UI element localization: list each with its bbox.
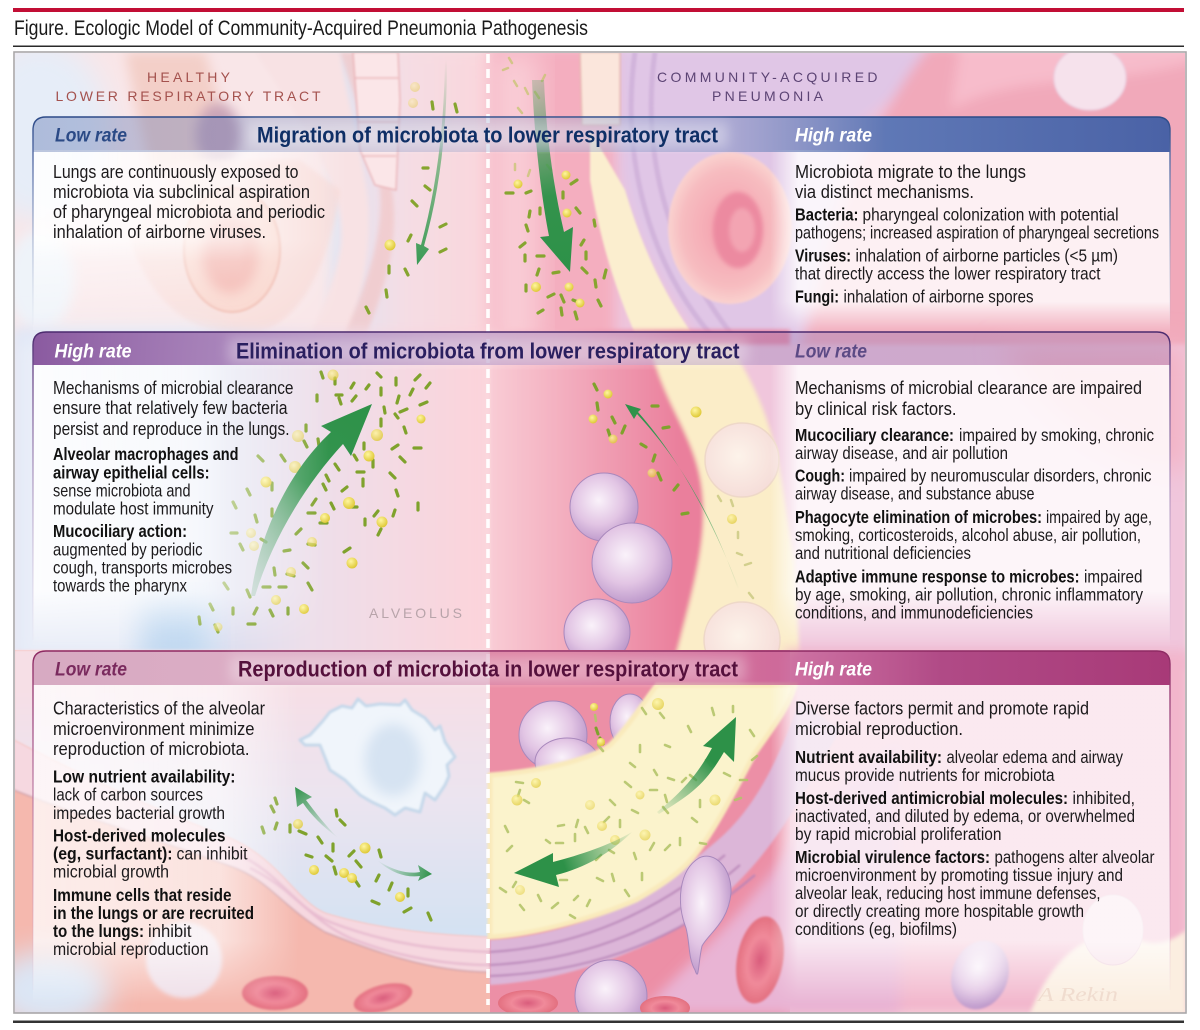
- healthy reproduction text: can inhibit: [176, 844, 248, 864]
- panel: migration: [33, 117, 1170, 335]
- pneumonia elimination text: impaired by smoking, chronic: [959, 425, 1154, 445]
- pneumonia reproduction text: Microbial virulence factors:: [795, 847, 990, 867]
- heading: community-acquired pneumonia: PNEUMONIA: [712, 88, 824, 104]
- healthy migration text: Lungs are continuously exposed to: [53, 161, 298, 182]
- healthy migration text: of pharyngeal microbiota and periodic: [53, 201, 325, 222]
- microbiota: migration panel: [366, 58, 606, 319]
- low rate tag: Low rate: [55, 126, 127, 146]
- low rate tag: Low rate: [55, 660, 127, 680]
- migration title: Migration of microbiota to lower respiratory tract: [257, 122, 718, 148]
- pneumonia reproduction text: pathogens alter alveolar: [994, 847, 1155, 867]
- pneumonia elimination text: by clinical risk factors.: [795, 398, 956, 419]
- pneumonia elimination text: Adaptive immune response to microbes:: [795, 566, 1080, 586]
- pneumonia reproduction text: Diverse factors permit and promote rapid: [795, 698, 1089, 718]
- healthy reproduction text: Low nutrient availability:: [53, 766, 236, 786]
- heading: community-acquired pneumonia: COMMUNITY-ACQUIRED: [657, 69, 878, 85]
- arrow: migration pneumonia high rate: [532, 80, 573, 272]
- migration left text backing: [34, 150, 313, 314]
- arrow: reproduction healthy up: [295, 787, 338, 838]
- healthy reproduction text: in the lungs or are recruited: [53, 903, 254, 923]
- elimination left text backing: [33, 365, 333, 650]
- healthy elimination text: Alveolar macrophages and: [53, 444, 238, 464]
- pneumonia migration text: [795, 161, 1159, 306]
- healthy migration text: inhalation of airborne viruses.: [53, 221, 266, 242]
- pneumonia elimination text: conditions, and immunodeficiencies: [795, 602, 1033, 622]
- healthy elimination text: sense microbiota and: [53, 480, 190, 500]
- pneumonia reproduction text: alveolar leak, reducing host immune defenses,: [795, 883, 1100, 903]
- reproduction panel outline: [33, 651, 1170, 990]
- pneumonia migration text: pharyngeal colonization with potential: [862, 204, 1118, 224]
- pneumonia migration text: via distinct mechanisms.: [795, 181, 974, 202]
- microbiota: elimination panel: [199, 370, 753, 632]
- pneumonia elimination text: Phagocyte elimination of microbes:: [795, 507, 1042, 527]
- pneumonia elimination text: impaired by age,: [1046, 507, 1152, 527]
- pneumonia migration text: Fungi:: [795, 286, 839, 306]
- healthy reproduction text: [53, 698, 265, 959]
- white blood cells: [570, 473, 638, 541]
- pneumonia reproduction text: mucus provide nutrients for microbiota: [795, 765, 1055, 785]
- pneumonia elimination text: by age, smoking, air pollution, chronic inflammatory: [795, 584, 1143, 604]
- cartilage rings: [353, 52, 400, 190]
- pneumonia reproduction text: conditions (eg, biofilms): [795, 919, 957, 939]
- arrow: reproduction pneumonia down: [514, 832, 632, 887]
- pneumonia elimination text: airway disease, and air pollution: [795, 443, 1008, 463]
- pneumonia elimination text: Mechanisms of microbial clearance are impaired: [795, 377, 1142, 398]
- pneumonia reproduction text: microbial reproduction.: [795, 718, 963, 739]
- bottom rule: [13, 1020, 1184, 1023]
- heading: healthy lower respiratory tract: HEALTHY: [147, 69, 231, 85]
- elimination right text backing: [770, 365, 1170, 650]
- healthy reproduction text: Characteristics of the alveolar: [53, 698, 265, 718]
- microbiota: reproduction panel: [262, 698, 757, 920]
- healthy reproduction text: microbial growth: [53, 862, 169, 882]
- pneumonia migration text: inhalation of airborne spores: [844, 286, 1034, 306]
- pneumonia elimination text: smoking, corticosteroids, alcohol abuse, air pollution,: [795, 525, 1141, 545]
- healthy elimination text: towards the pharynx: [53, 576, 187, 596]
- droplet: [680, 856, 731, 974]
- artist signature: A Rekin: [1035, 984, 1118, 1006]
- healthy elimination text: airway epithelial cells:: [53, 462, 210, 482]
- healthy elimination text: [53, 377, 294, 596]
- heading: community-acquired pneumonia: [657, 69, 878, 104]
- pneumonia reproduction text: by rapid microbial proliferation: [795, 824, 1002, 844]
- low rate tag: Low rate: [795, 342, 867, 362]
- dashed center divider: [486, 54, 490, 1005]
- healthy reproduction text: (eg, surfactant):: [53, 844, 172, 864]
- panel: reproduction: [33, 651, 1170, 1005]
- central alveolus band: [10, 330, 1186, 678]
- high rate tag: High rate: [795, 660, 872, 680]
- migration header band: [33, 117, 1170, 152]
- migration right text backing: [770, 150, 1170, 335]
- healthy elimination text: modulate host immunity: [53, 498, 214, 518]
- panel: elimination: [33, 332, 1170, 650]
- pneumonia reproduction text: alveolar edema and airway: [946, 747, 1123, 767]
- reproduction header band: [33, 651, 1170, 685]
- pneumonia migration text: Bacteria:: [795, 204, 858, 224]
- pneumonia migration text: that directly access the lower respiratory tract: [795, 264, 1101, 284]
- pneumonia reproduction text: microenvironment by promoting tissue injury and: [795, 865, 1123, 885]
- healthy reproduction text: lack of carbon sources: [53, 784, 203, 804]
- pneumonia elimination text: [795, 377, 1154, 622]
- elimination panel outline: [33, 332, 1170, 640]
- pneumonia elimination text: Mucociliary clearance:: [795, 425, 954, 445]
- healthy migration text: [53, 161, 325, 242]
- high rate tag: High rate: [795, 126, 872, 146]
- migration panel outline: [33, 117, 1170, 325]
- arrow: elimination pneumonia low rate: [625, 404, 740, 590]
- healthy elimination text: Mechanisms of microbial clearance: [53, 377, 294, 398]
- reproduction title: Reproduction of microbiota in lower respiratory tract: [238, 656, 738, 682]
- healthy migration text: microbiota via subclinical aspiration: [53, 181, 310, 202]
- healthy reproduction text: Host-derived molecules: [53, 826, 226, 846]
- reproduction right text backing: [770, 685, 1170, 1005]
- healthy elimination text: persist and reproduce in the lungs.: [53, 418, 290, 439]
- pneumonia elimination text: and nutritional deficiencies: [795, 543, 971, 563]
- pneumonia elimination text: Cough:: [795, 466, 845, 486]
- pneumonia elimination text: airway disease, and substance abuse: [795, 484, 1034, 504]
- macrophage: [300, 699, 455, 815]
- pneumonia reproduction text: or directly creating more hospitable growth: [795, 901, 1084, 921]
- healthy reproduction text: reproduction of microbiota.: [53, 738, 250, 759]
- healthy reproduction text: microenvironment minimize: [53, 718, 254, 739]
- elimination header band: [33, 332, 1170, 365]
- top red rule: [13, 8, 1184, 12]
- lower tissue and alveolar wall: [0, 650, 1190, 1030]
- heading: healthy lower respiratory tract: LOWER RESPIRATORY TRACT: [56, 88, 321, 104]
- healthy elimination text: Mucociliary action:: [53, 521, 187, 541]
- pneumonia reproduction text: [795, 698, 1155, 939]
- healthy reproduction text: Immune cells that reside: [53, 885, 232, 905]
- arrow: reproduction healthy right: [377, 860, 432, 881]
- elimination title: Elimination of microbiota from lower respiratory tract: [236, 338, 740, 364]
- healthy elimination text: augmented by periodic: [53, 540, 203, 560]
- arrow: migration healthy low rate: [416, 60, 447, 265]
- pneumonia reproduction text: inactivated, and diluted by edema, or overwhelmed: [795, 806, 1135, 826]
- figure title: Figure. Ecologic Model of Community-Acquired Pneumonia Pathogenesis: [14, 16, 588, 40]
- upper right tissue: [490, 46, 1200, 356]
- healthy elimination text: ensure that relatively few bacteria: [53, 397, 288, 418]
- pneumonia migration text: Viruses:: [795, 246, 851, 266]
- healthy reproduction text: impedes bacterial growth: [53, 803, 225, 823]
- healthy elimination text: cough, transports microbes: [53, 558, 232, 578]
- purple wall: [489, 718, 796, 986]
- reproduction left text backing: [33, 685, 300, 1005]
- pneumonia migration text: Microbiota migrate to the lungs: [795, 161, 1026, 182]
- pneumonia reproduction text: Nutrient availability:: [795, 747, 942, 767]
- pneumonia reproduction text: inhibited,: [1072, 788, 1135, 808]
- title rule: [13, 46, 1184, 47]
- pneumonia migration text: inhalation of airborne particles (<5 µm): [856, 246, 1118, 266]
- upper left tissue: [15, 53, 402, 330]
- alveolus label: ALVEOLUS: [369, 605, 462, 621]
- heading: healthy lower respiratory tract: [56, 69, 321, 104]
- pneumonia elimination text: impaired: [1084, 566, 1142, 586]
- edema fluid: [490, 685, 795, 937]
- pneumonia reproduction text: Host-derived antimicrobial molecules:: [795, 788, 1068, 808]
- high rate tag: High rate: [54, 342, 132, 362]
- arrow: elimination healthy high rate: [251, 404, 372, 596]
- healthy reproduction text: to the lungs:: [53, 921, 144, 941]
- healthy reproduction text: microbial reproduction: [53, 939, 208, 959]
- arrow: reproduction pneumonia up: [657, 717, 736, 814]
- healthy reproduction text: inhibit: [148, 921, 192, 941]
- pneumonia elimination text: impaired by neuromuscular disorders, chronic: [849, 466, 1152, 486]
